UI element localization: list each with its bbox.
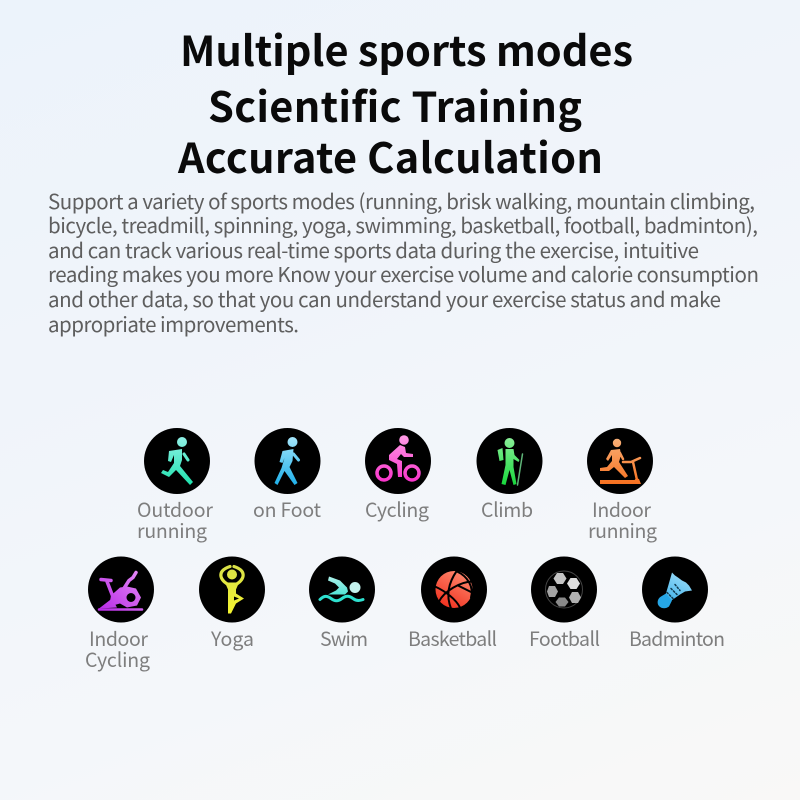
label: indoor running (588, 494, 657, 544)
label: outdoor running: running (137, 515, 207, 544)
sport mode: indoor running (587, 428, 657, 544)
label: indoor cycling (85, 623, 150, 673)
description text block: and can track various real-time sports data during the exercise, intuitive (48, 234, 699, 264)
sport mode: climb (476, 428, 542, 523)
label: cycling: Cycling (365, 494, 429, 523)
label: basketball: Basketball (408, 623, 497, 652)
sport mode: yoga (199, 556, 265, 652)
sport mode: indoor cycling (85, 556, 154, 673)
title: Accurate Calculation (177, 125, 603, 185)
icon: cyclist (377, 435, 419, 480)
sport mode: cycling (365, 428, 431, 523)
icon: swimmer (320, 576, 363, 601)
description text block (48, 185, 759, 338)
description text block: appropriate improvements. (48, 308, 299, 338)
description text block: and other data, so that you can understand your exercise status and make (48, 283, 721, 313)
label: outdoor running (137, 494, 213, 544)
label: badminton: Badminton (629, 623, 725, 652)
description text block: reading makes you more Know your exercise volume and calorie consumption (48, 258, 759, 288)
title: Multiple sports modes (180, 18, 633, 78)
label: indoor running: running (588, 515, 657, 544)
label: swim: Swim (320, 623, 368, 652)
label: football: Football (529, 623, 600, 652)
label: indoor cycling: Cycling (85, 644, 150, 673)
sport mode: outdoor running (137, 428, 213, 544)
description text block: Support a variety of sports modes (running, brisk walking, mountain climbing, (48, 185, 755, 215)
label: indoor running: Indoor (592, 494, 651, 523)
label: outdoor running: Outdoor (137, 494, 213, 523)
label: indoor cycling: Indoor (89, 623, 148, 652)
icon: hiker (498, 438, 522, 485)
description text block: bicycle, treadmill, spinning, yoga, swimming, basketball, football, badminton), (48, 209, 758, 239)
icon: basketball (435, 570, 473, 608)
icon: treadmill (600, 439, 641, 484)
icon: exercise bike (99, 572, 142, 610)
title: Scientific Training (208, 74, 582, 134)
label: yoga: Yoga (210, 623, 254, 652)
sport mode: on foot (253, 428, 322, 523)
icon: walker (274, 437, 298, 485)
sport mode: football (529, 556, 600, 652)
icon: runner (161, 437, 193, 485)
icon: yoga pose (221, 566, 244, 614)
sport mode: basketball (408, 556, 497, 652)
icon: football (546, 571, 582, 608)
sport mode: badminton (629, 556, 725, 652)
label: on foot: on Foot (253, 494, 322, 523)
sport mode: swim (309, 556, 375, 652)
icon: shuttlecock (658, 572, 692, 608)
label: climb: Climb (481, 494, 533, 523)
title (177, 18, 633, 185)
